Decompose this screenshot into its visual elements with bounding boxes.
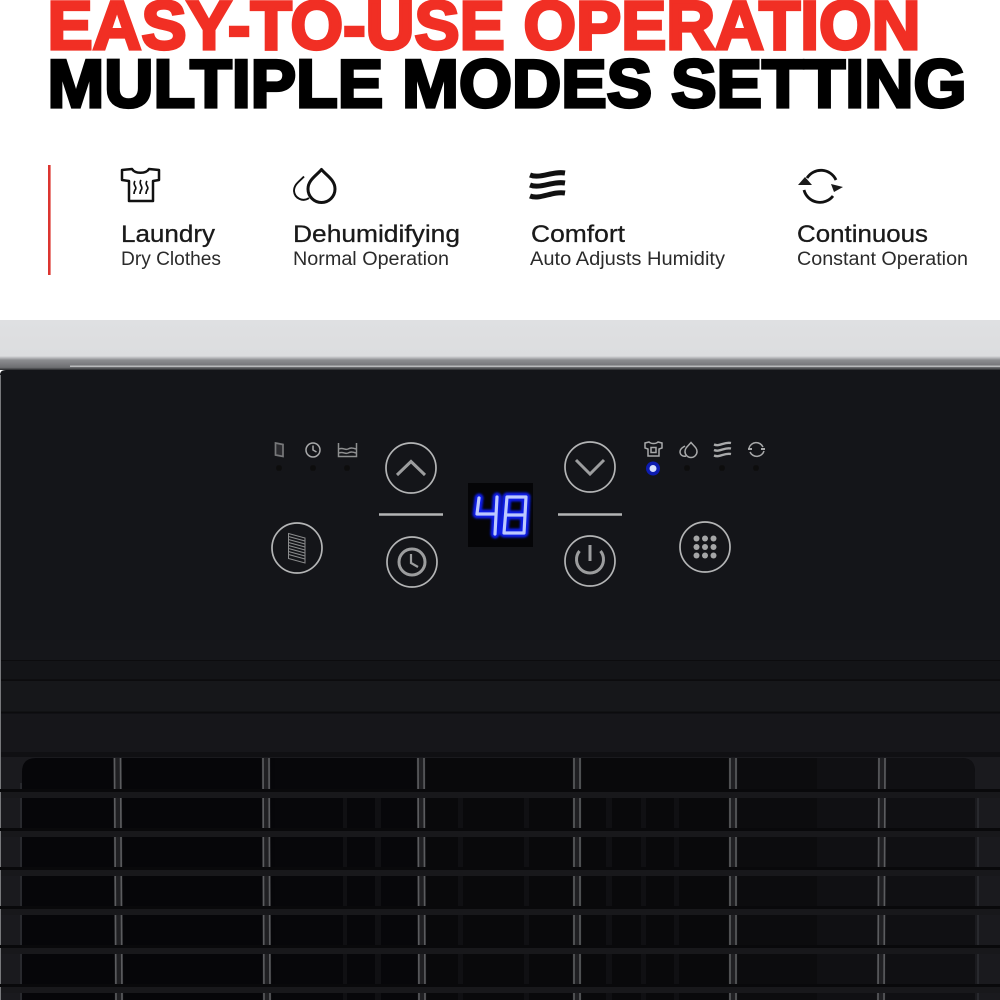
icon: water drops xyxy=(294,170,335,202)
mode: dehumidifying xyxy=(293,170,460,270)
status icon: filter xyxy=(276,443,283,456)
divider right xyxy=(558,513,622,516)
status icon: waves xyxy=(714,443,731,456)
label: Dehumidifying: Dehumidifying xyxy=(293,221,460,248)
button: power xyxy=(565,536,615,586)
body moulding lines xyxy=(1,640,1000,1000)
button: up xyxy=(386,443,436,493)
icon: air waves xyxy=(530,173,565,197)
title xyxy=(48,0,966,122)
label: Comfort: Comfort xyxy=(531,221,625,248)
button: filter xyxy=(272,523,322,573)
wall and top edge of unit xyxy=(0,320,1000,370)
sublabel: Dry Clothes: Dry Clothes xyxy=(121,249,221,270)
label: Laundry: Laundry xyxy=(121,221,216,248)
status icon: water tank xyxy=(338,443,356,456)
button: timer xyxy=(387,537,437,587)
status icon: laundry xyxy=(645,442,662,456)
status icon: cycle xyxy=(748,443,765,456)
label: Continuous: Continuous xyxy=(797,221,928,248)
active LED xyxy=(646,462,660,476)
icon: cycle arrows xyxy=(798,170,843,202)
status icon: clock xyxy=(306,443,320,457)
digital display: 48 xyxy=(468,483,533,547)
title line 2: MULTIPLE MODES SETTING xyxy=(48,46,966,122)
unit body xyxy=(0,370,1000,1000)
horizontal louvres xyxy=(0,789,1000,993)
vertical louvres xyxy=(21,758,978,1000)
red accent bar xyxy=(48,165,51,275)
panel: product photo xyxy=(0,320,1000,1000)
status icon: drops xyxy=(680,442,697,458)
air outlet grille xyxy=(0,758,1000,1000)
button: mode xyxy=(680,522,730,572)
sublabel: Auto Adjusts Humidity: Auto Adjusts Humidity xyxy=(530,249,726,270)
sublabel: Normal Operation: Normal Operation xyxy=(293,249,449,270)
mode: continuous xyxy=(797,170,968,270)
faint inner slats xyxy=(343,798,679,1000)
mode: laundry xyxy=(121,169,221,270)
mode: comfort xyxy=(530,173,726,270)
sublabel: Constant Operation: Constant Operation xyxy=(797,249,968,270)
indicator LEDs xyxy=(276,465,759,471)
icon: t-shirt with steam xyxy=(122,169,159,201)
control panel xyxy=(272,442,765,587)
button: down xyxy=(565,442,615,492)
divider left xyxy=(379,513,443,516)
